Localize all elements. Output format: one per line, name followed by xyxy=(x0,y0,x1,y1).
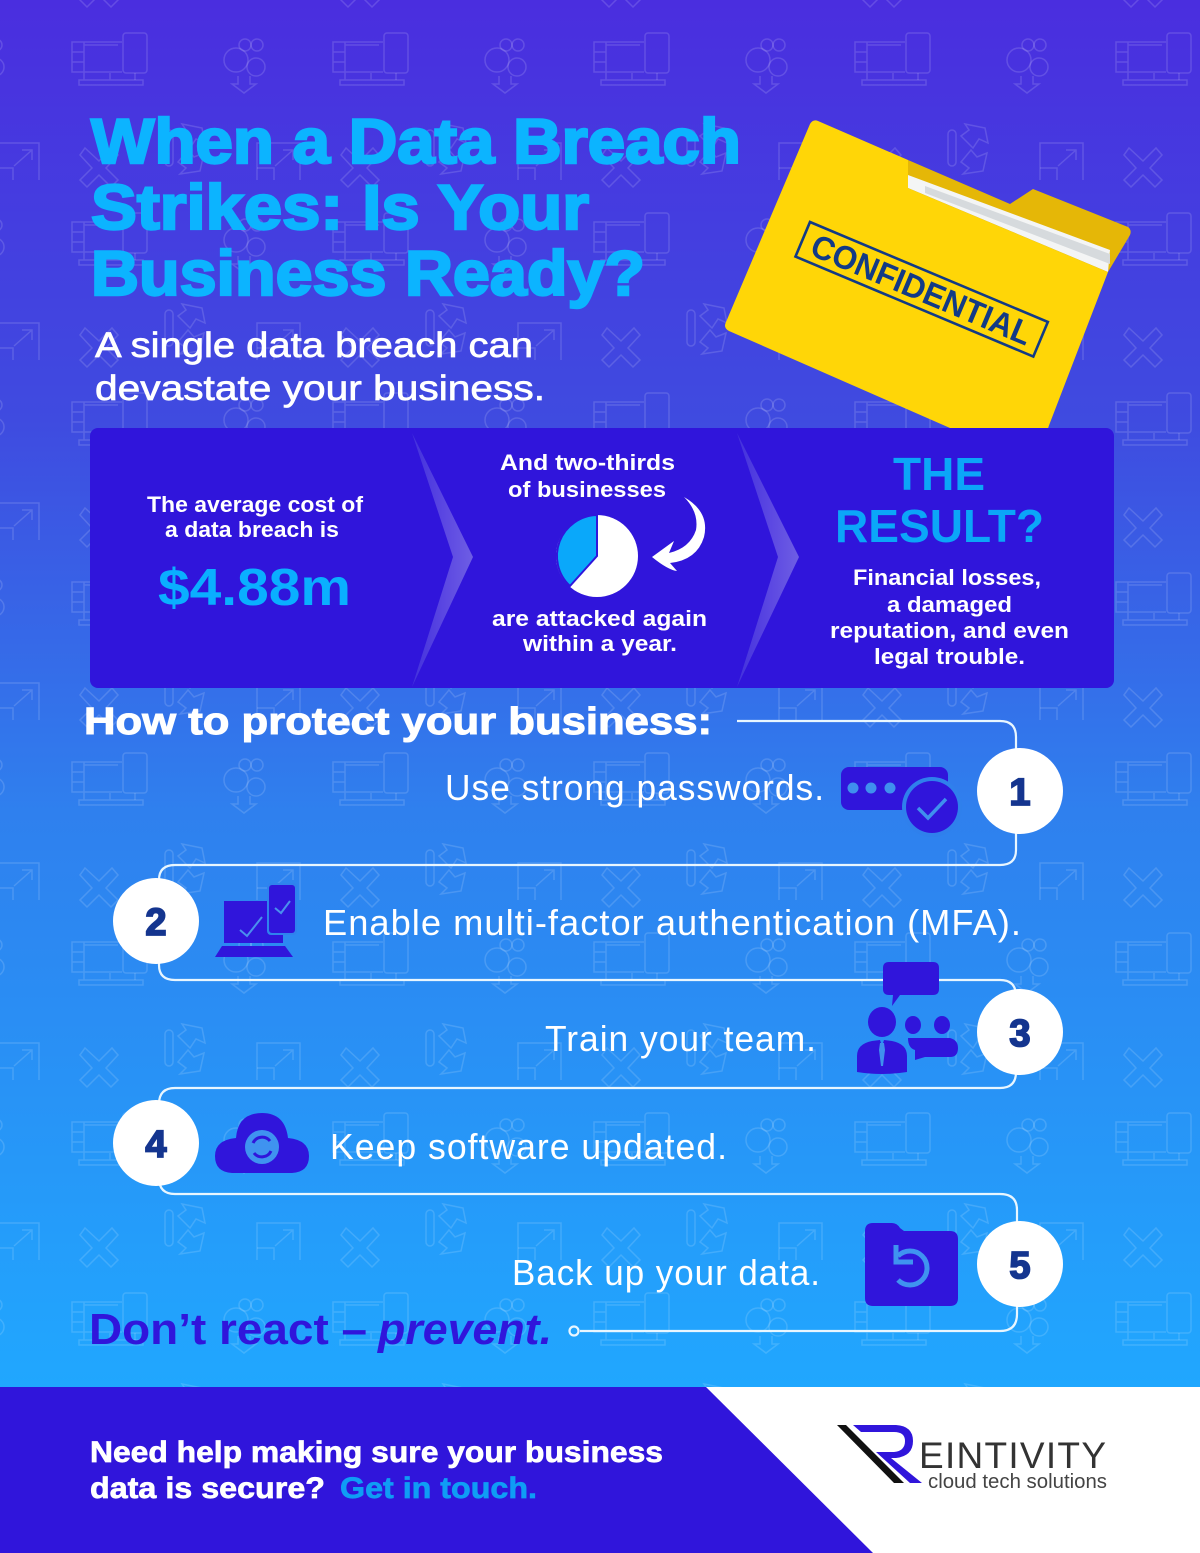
closing line xyxy=(89,1305,552,1354)
title: Strikes: Is Your xyxy=(91,173,589,243)
footer call to action: Need help making sure your business xyxy=(90,1436,663,1469)
number badge 2 xyxy=(113,878,199,964)
step 1 text: Use strong passwords. xyxy=(445,767,825,808)
result heading: RESULT? xyxy=(835,500,1044,552)
average cost text: The average cost of xyxy=(147,492,364,517)
icon: confidential folder xyxy=(725,120,1131,428)
icon: password xyxy=(841,767,962,837)
number badge 3 xyxy=(977,989,1063,1075)
icon: cloud sync xyxy=(215,1113,309,1173)
chevron divider two xyxy=(737,433,799,687)
number badge 5: 5 xyxy=(1009,1245,1031,1287)
connector line xyxy=(159,721,1017,1336)
footer call to action: Get in touch. xyxy=(340,1472,537,1505)
step 3 text: Train your team. xyxy=(545,1018,817,1059)
two-thirds text: of businesses xyxy=(508,477,666,502)
step 2: multi-factor authentication xyxy=(113,878,1022,964)
footer call to action: data is secure? xyxy=(90,1472,325,1505)
chevron divider one xyxy=(412,433,473,687)
result heading xyxy=(835,448,1044,552)
pie chart xyxy=(556,515,638,597)
number badge 5 xyxy=(977,1221,1063,1307)
stat: cost: $4.88m xyxy=(158,559,351,617)
number badge 2: 2 xyxy=(145,902,167,944)
subtitle xyxy=(95,326,545,408)
step 4: software updates xyxy=(113,1100,728,1186)
icon: team xyxy=(857,962,958,1074)
heading: how to protect: How to protect your business: xyxy=(84,701,712,743)
result text: a damaged xyxy=(887,592,1012,617)
average cost text xyxy=(147,492,364,542)
step 5 text: Back up your data. xyxy=(512,1252,821,1293)
result heading: THE xyxy=(893,448,985,500)
stamp: confidential: CONFIDENTIAL xyxy=(806,227,1038,352)
attacked text: within a year. xyxy=(522,631,677,656)
step 4 text: Keep software updated. xyxy=(330,1126,728,1167)
step 3: train team xyxy=(545,962,1063,1075)
footer xyxy=(0,1387,1200,1553)
step 2 text: Enable multi-factor authentication (MFA). xyxy=(323,902,1022,943)
two-thirds text xyxy=(500,450,675,502)
panel: statistics xyxy=(90,428,1114,688)
result text xyxy=(830,565,1069,669)
subtitle: A single data breach can xyxy=(95,326,533,365)
number badge 1 xyxy=(977,748,1063,834)
closing line: Don’t react – xyxy=(89,1305,367,1354)
attacked text: are attacked again xyxy=(492,606,707,631)
number badge 3: 3 xyxy=(1009,1013,1031,1055)
title xyxy=(91,107,741,309)
result text: reputation, and even xyxy=(830,618,1069,643)
arrow xyxy=(652,497,705,571)
number badge 4 xyxy=(113,1100,199,1186)
two-thirds text: And two-thirds xyxy=(500,450,675,475)
number badge 4: 4 xyxy=(145,1124,167,1166)
closing line: prevent. xyxy=(377,1305,552,1354)
logo: Reintivity: cloud tech solutions xyxy=(928,1471,1107,1493)
icon: devices xyxy=(215,883,297,957)
result text: Financial losses, xyxy=(853,565,1041,590)
title: Business Ready? xyxy=(91,239,645,309)
icon: backup folder xyxy=(865,1223,958,1306)
average cost text: a data breach is xyxy=(165,517,339,542)
footer call to action xyxy=(90,1436,663,1505)
attacked text xyxy=(492,606,707,656)
subtitle: devastate your business. xyxy=(95,369,545,408)
logo: Reintivity: EINTIVITY xyxy=(919,1435,1106,1476)
result text: legal trouble. xyxy=(874,644,1025,669)
number badge 1: 1 xyxy=(1009,772,1031,814)
logo: Reintivity xyxy=(837,1425,1107,1493)
step 5: back up data xyxy=(512,1221,1063,1307)
title: When a Data Breach xyxy=(91,107,741,177)
step 1: strong passwords xyxy=(445,748,1063,837)
